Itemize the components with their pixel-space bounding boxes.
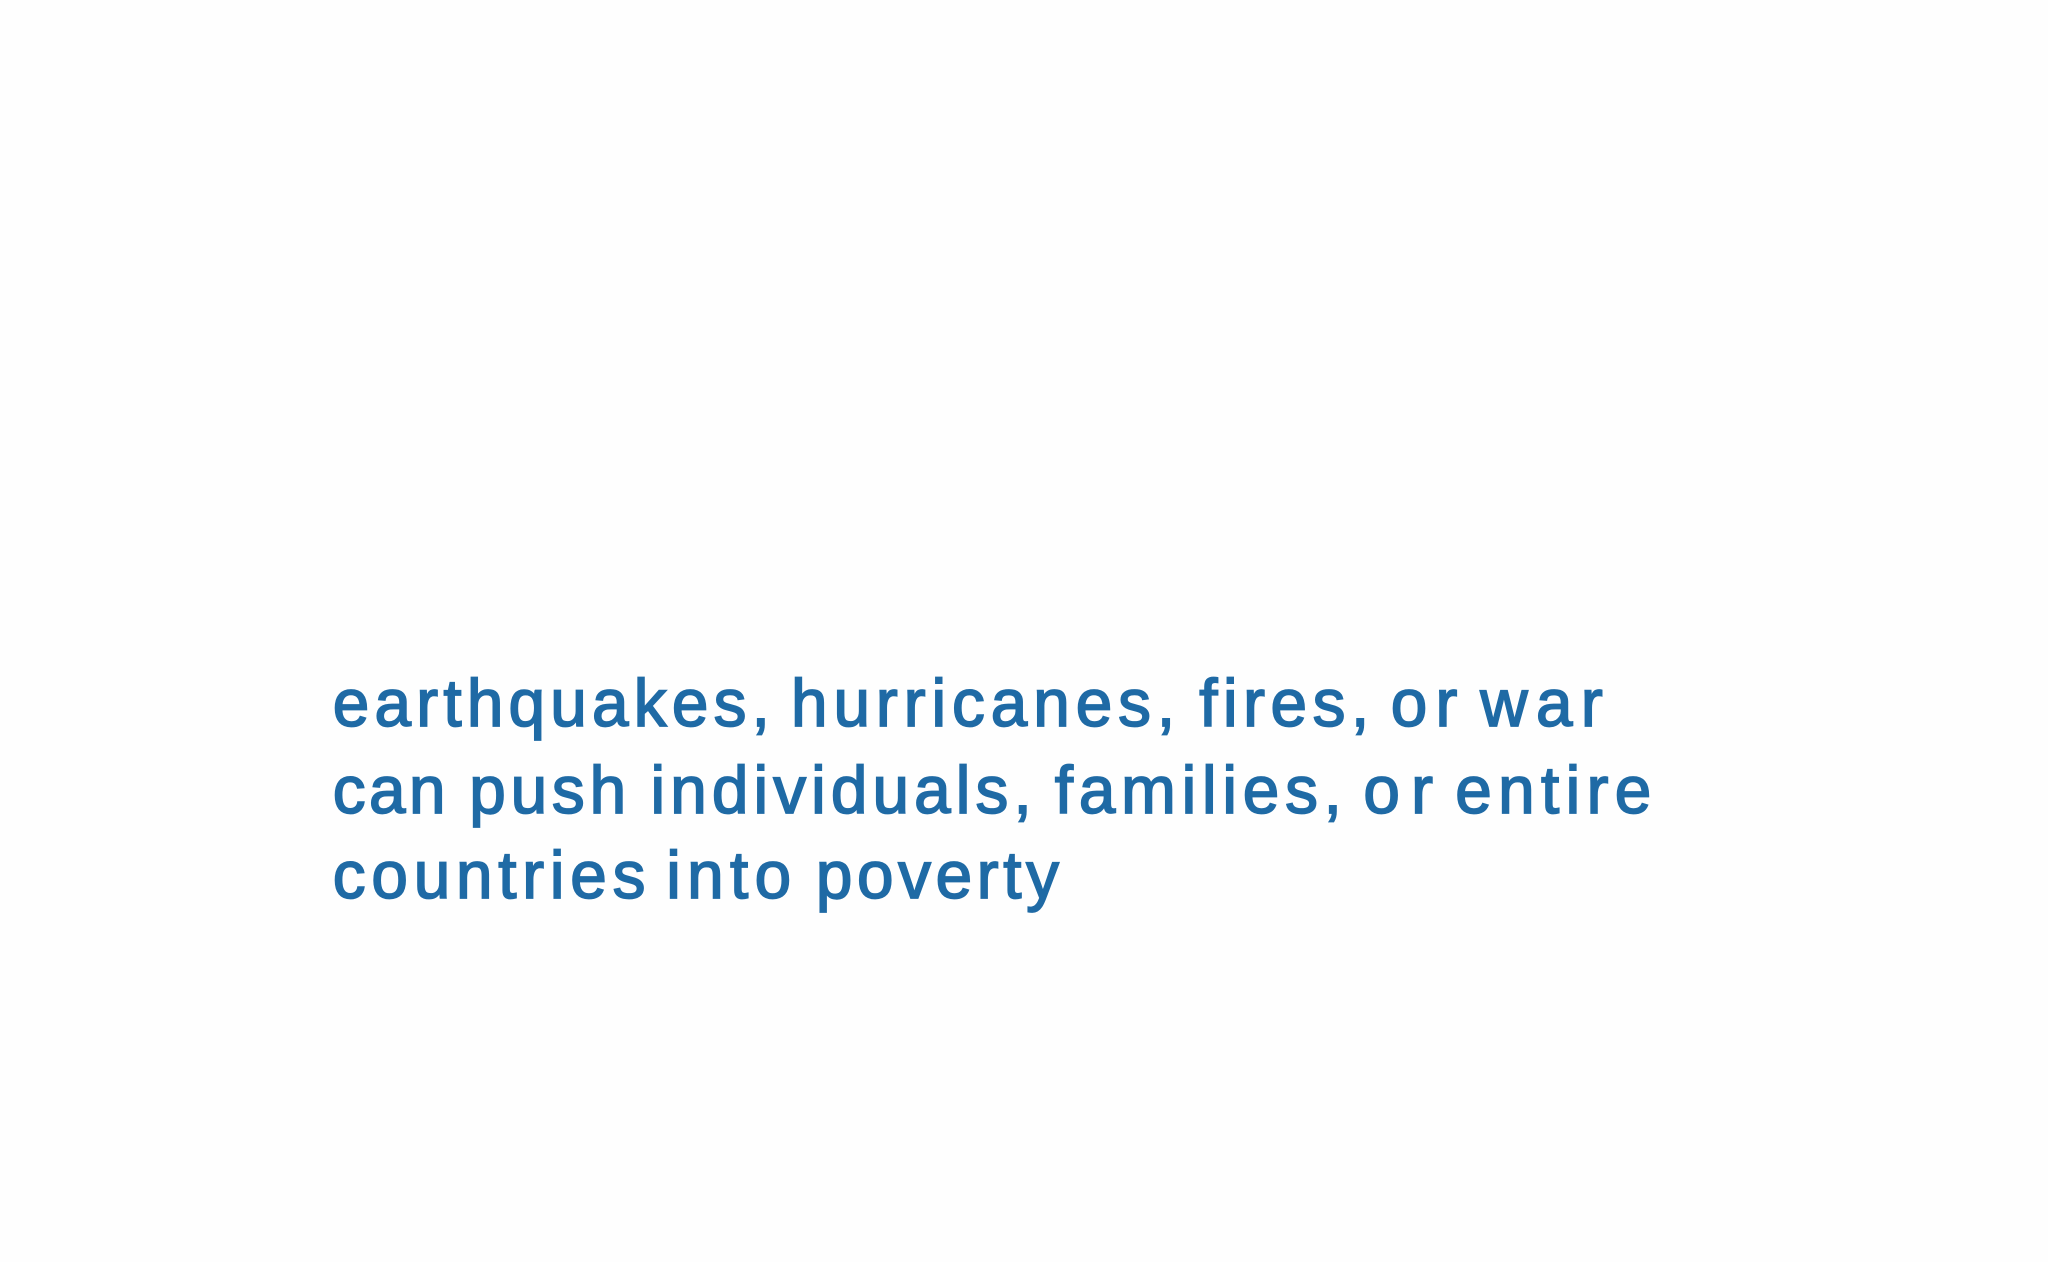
text block: earthquakes caption xyxy=(333,666,1651,913)
text block: earthquakes caption: war xyxy=(1479,666,1603,741)
text block: earthquakes caption: or xyxy=(1391,666,1457,741)
text block: earthquakes caption: individuals, xyxy=(650,753,1032,828)
text block: earthquakes caption: poverty xyxy=(816,838,1060,913)
text block: earthquakes caption: or xyxy=(1363,753,1433,828)
text block: earthquakes caption: hurricanes, xyxy=(791,666,1175,741)
text block: earthquakes caption: into xyxy=(666,838,791,913)
text block: earthquakes caption: can xyxy=(333,753,445,828)
text block: earthquakes caption: families, xyxy=(1055,753,1342,828)
text block: earthquakes caption: entire xyxy=(1455,753,1651,828)
text block: earthquakes caption: countries xyxy=(333,838,645,913)
text block: earthquakes caption: push xyxy=(469,753,626,828)
text block: earthquakes caption: earthquakes, xyxy=(333,666,770,741)
text block: earthquakes caption: fires, xyxy=(1199,666,1369,741)
